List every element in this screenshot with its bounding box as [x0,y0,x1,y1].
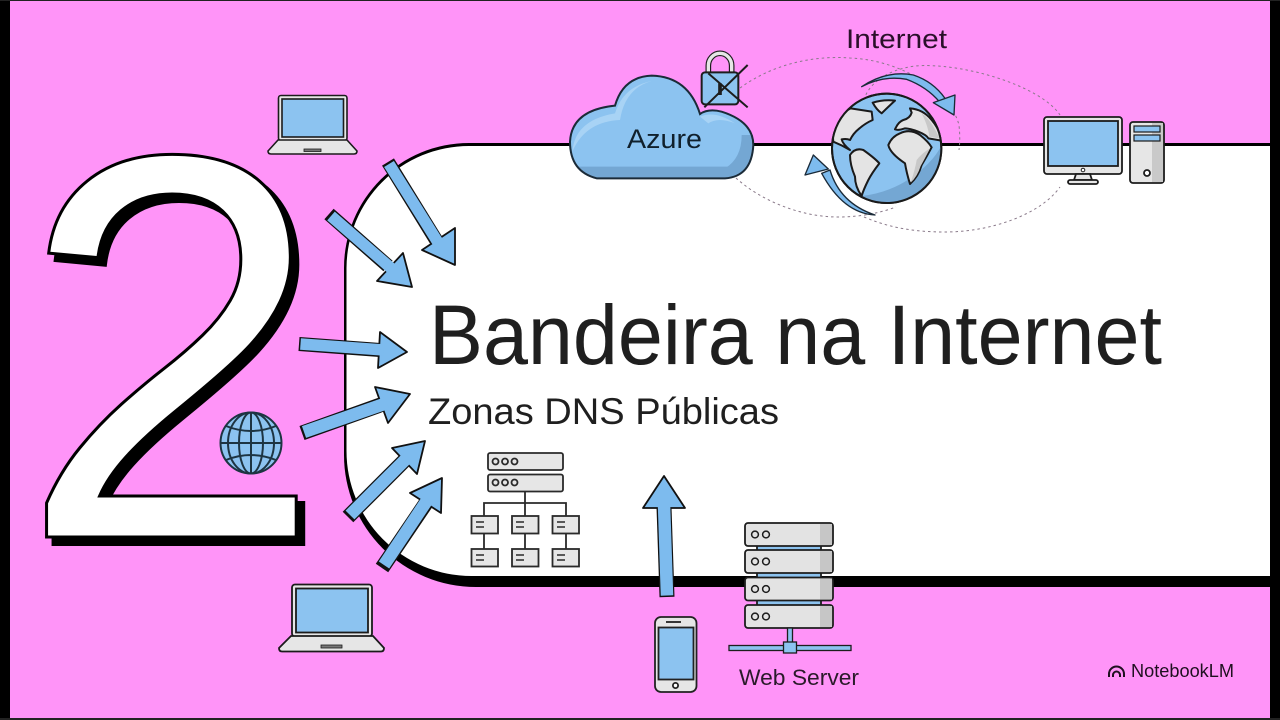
big number 2: 2 [19,42,324,654]
label: Azure: Azure [627,124,702,154]
arrow 6: from bottom laptop [382,478,442,568]
arrow 1: top right-diagonal [388,162,455,265]
subtitle: Zonas DNS Públicas [428,391,779,432]
logo: NotebookLM: NotebookLM [1131,661,1234,681]
icon: smartphone [655,617,696,692]
icon: Azure cloud [569,74,754,180]
icon: laptop top [268,96,357,154]
big number 2: 2 [26,49,331,661]
icon: desktop computer [1044,117,1164,184]
label: web server: Web Server [739,665,859,690]
arrow 3: horizontal [299,332,407,368]
icon: web server rack [729,523,851,653]
icon: small wireframe globe [220,412,282,474]
arrow 5: lower diagonal [348,441,425,517]
dashed orbit paths [736,58,1060,232]
icon: laptop bottom [279,584,384,652]
arrow 4: rising from globe [302,387,410,433]
icon: crossed padlock [702,53,748,107]
icon: curved arrow bottom [805,155,875,215]
icon: DNS hierarchy [472,453,579,566]
arrow 2: upper diagonal [329,214,412,287]
title: Bandeira na Internet [429,288,1162,382]
icon: earth globe [832,94,942,203]
panel: white rounded title card [344,143,1270,587]
arrow 7: up from phone [643,476,685,597]
icon: curved arrow top [862,74,955,115]
label: Internet: Internet [846,24,948,54]
